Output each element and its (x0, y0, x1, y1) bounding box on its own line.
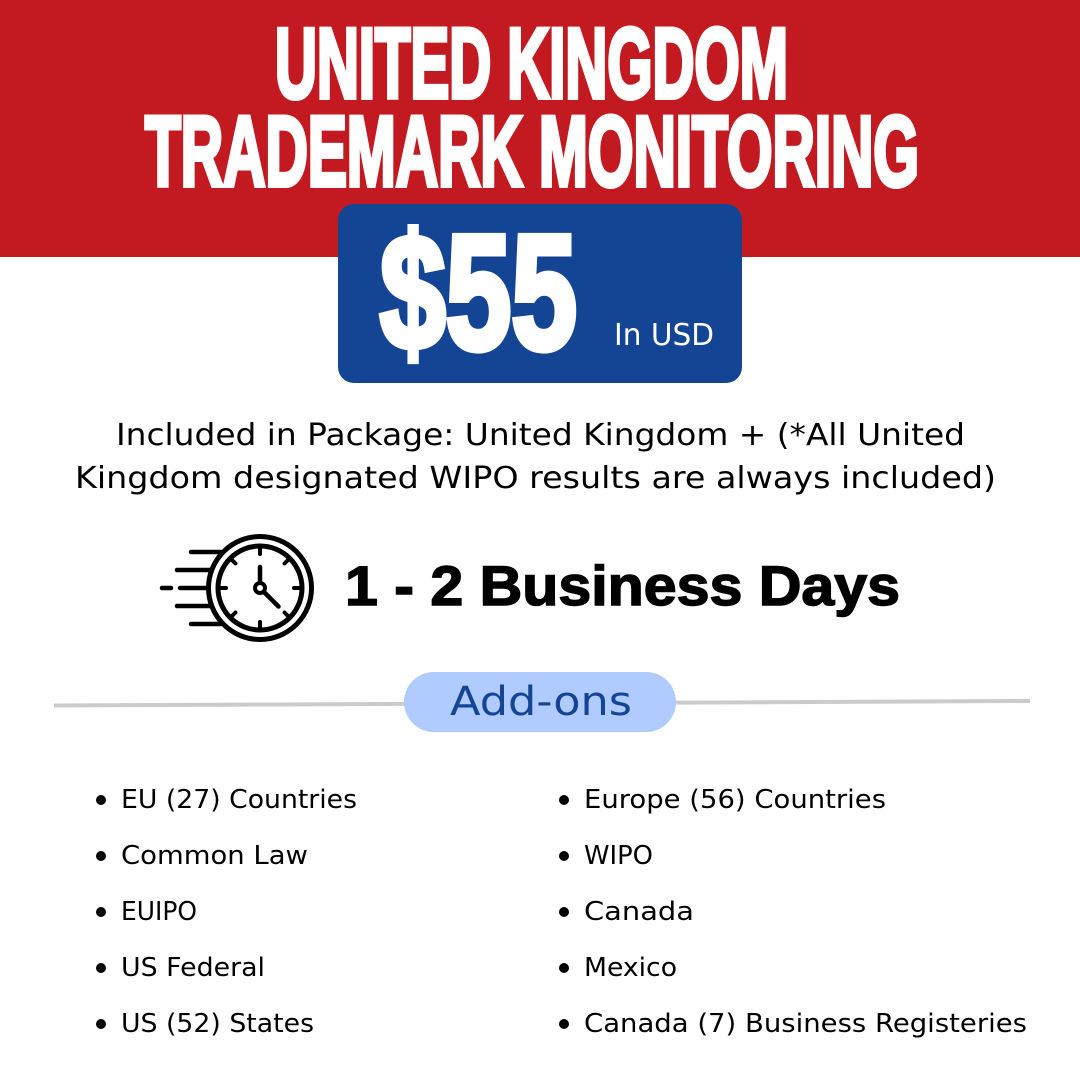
add-ons list: left column: EUIPO (121, 897, 197, 927)
price box (338, 200, 742, 384)
package description (75, 418, 996, 496)
add-ons list: left column: US (52) States (121, 1009, 314, 1039)
add-ons badge (404, 672, 676, 732)
add-ons list: left column: US Federal (121, 953, 265, 983)
add-ons list: right column: WIPO (584, 841, 653, 871)
add-ons list: right column: Canada (7) Business Registeries (584, 1009, 1027, 1039)
add-ons divider (54, 701, 1030, 706)
add-ons list: left column (96, 785, 357, 1039)
title (145, 8, 919, 206)
add-ons list: right column (559, 785, 1027, 1039)
currency note: In USD (614, 318, 714, 353)
add-ons list: left column: Common Law (121, 841, 308, 871)
delivery time: 1 - 2 Business Days (345, 554, 900, 617)
package description: Kingdom designated WIPO results are always included) (75, 461, 996, 496)
add-ons list: right column: Mexico (584, 953, 677, 983)
header banner (0, 0, 1080, 257)
add-ons list: right column: Europe (56) Countries (584, 785, 886, 815)
add-ons list: left column: EU (27) Countries (121, 785, 357, 815)
price: $55 (380, 200, 577, 384)
add-ons list: right column: Canada (584, 897, 694, 927)
package description: Included in Package: United Kingdom + (*All United (116, 418, 965, 453)
icon: fast clock (162, 536, 312, 640)
add-ons badge: Add-ons (450, 679, 632, 725)
